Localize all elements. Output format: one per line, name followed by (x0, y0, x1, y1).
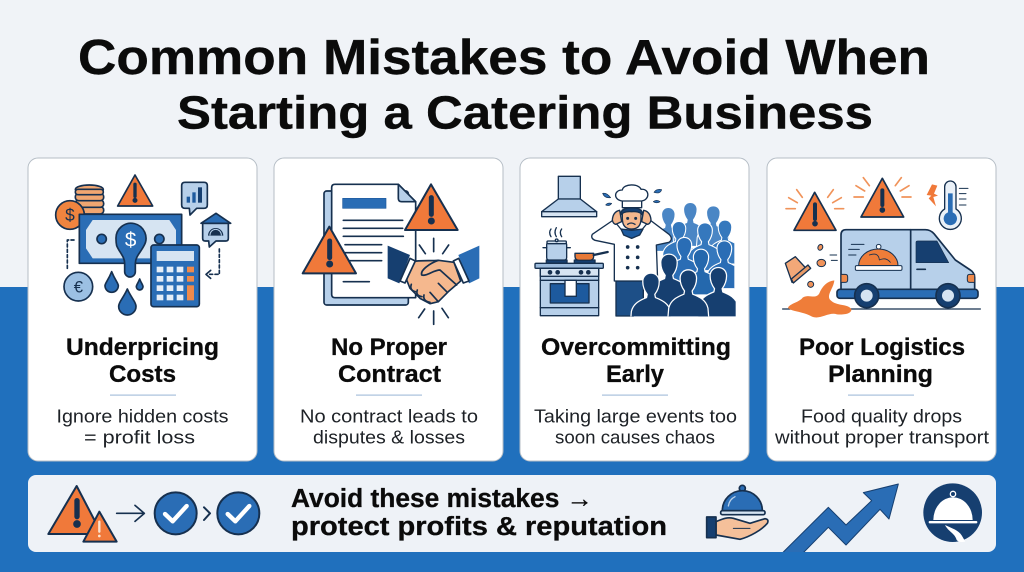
icon: cloche logo (923, 483, 982, 542)
text: logistics description: without proper transport (774, 426, 989, 448)
icon: dashed flow lines (67, 240, 219, 278)
icon: crowd back row (656, 203, 734, 294)
text: contract description (300, 406, 478, 448)
icon: euro coin (64, 272, 93, 301)
title (78, 31, 930, 138)
text: takeaway message: Avoid these mistakes → (291, 485, 593, 513)
heading: poor logistics planning (799, 334, 965, 388)
icon: warning to checks flow (48, 486, 259, 542)
icon: warning triangle left (303, 227, 356, 273)
icon: calculator (151, 245, 199, 307)
icon: contract document (324, 184, 416, 305)
panel: overcommitting early (520, 158, 749, 461)
icon: warning triangles (48, 486, 117, 542)
icon: warning rays center (854, 178, 911, 197)
arrow (117, 505, 144, 521)
icon: delivery van (837, 230, 978, 308)
text: logistics description: Food quality drops (801, 406, 962, 426)
icon: money leaking and calculator (56, 175, 231, 315)
icon: dollar coin (56, 201, 84, 229)
icon: check circle two (217, 492, 259, 534)
panel: bottom takeaway bar (28, 475, 996, 553)
panel: no proper contract (274, 158, 503, 461)
icon: spill (788, 280, 851, 317)
text: overcommitting description (534, 406, 737, 448)
icon: ground line (783, 307, 980, 311)
text: takeaway message: protect profits & reputation (291, 513, 667, 541)
title: Common Mistakes to Avoid When (78, 31, 930, 85)
icon: chef (592, 185, 671, 316)
text: logistics description (774, 406, 989, 448)
icon: warning triangle left (794, 192, 836, 230)
text: contract description: No contract leads to (300, 406, 478, 426)
icon: banknote (79, 214, 182, 263)
heading: poor logistics planning: Poor Logistics (799, 334, 965, 361)
arrow: rising growth (783, 484, 898, 553)
title: Starting a Catering Business (177, 86, 873, 138)
heading: no proper contract: Contract (338, 361, 441, 388)
heading: underpricing costs: Costs (109, 361, 176, 388)
text: underpricing description: = profit loss (84, 426, 195, 448)
icon: food debris (785, 244, 837, 287)
icon: overwhelmed chef and crowd (535, 176, 743, 327)
text: overcommitting description: Taking large events too (534, 406, 737, 426)
icon: impact rays (419, 238, 449, 324)
icon: van with spill and warnings (783, 178, 980, 317)
heading: poor logistics planning: Planning (828, 361, 933, 388)
icon: drops (105, 272, 143, 315)
icon: lightning (927, 184, 938, 206)
icon: melting dollar: $ (125, 228, 137, 251)
text: underpricing description: Ignore hidden costs (56, 406, 228, 426)
heading: overcommitting early: Early (606, 361, 665, 388)
heading: overcommitting early: Overcommitting (541, 334, 731, 361)
icon: cloche on hand, growth arrow, logo (707, 483, 982, 553)
heading: overcommitting early (541, 334, 731, 388)
icon: thermometer (939, 181, 968, 229)
icon: pot (543, 239, 570, 260)
icon: coin stack (75, 185, 104, 214)
icon: frying pan (575, 252, 608, 260)
heading: no proper contract: No Proper (331, 334, 447, 361)
panel: underpricing costs (28, 158, 257, 461)
icon: range hood (542, 176, 597, 217)
icon: euro coin: € (74, 278, 84, 297)
arrow: chevron (204, 507, 210, 520)
icon: handshake (388, 246, 479, 304)
icon: warning triangle (118, 175, 153, 206)
icon: check circle one (155, 492, 197, 534)
text: overcommitting description: soon causes chaos (555, 426, 715, 448)
text: contract description: disputes & losses (313, 426, 465, 448)
background: lower blue band (0, 287, 1024, 572)
text: underpricing description (56, 406, 228, 448)
heading: underpricing costs: Underpricing (66, 334, 219, 361)
icon: warning rays left (786, 190, 844, 209)
heading: underpricing costs (66, 334, 219, 388)
text: takeaway message (291, 485, 667, 541)
icon: warning triangle right (405, 184, 458, 230)
icon: contract with warnings and handshake (303, 184, 479, 324)
panel: poor logistics planning (767, 158, 996, 461)
icon: chart speech bubble (182, 182, 207, 215)
icon: warning triangle center (861, 178, 904, 217)
icon: cloche on hand (707, 485, 768, 539)
icon: dollar coin: $ (65, 205, 75, 225)
icon: stove (535, 228, 603, 316)
icon: crowd front row (630, 254, 736, 316)
heading: no proper contract (331, 334, 447, 388)
icon: melting dollar (116, 223, 146, 277)
icon: house speech bubble (201, 213, 231, 247)
